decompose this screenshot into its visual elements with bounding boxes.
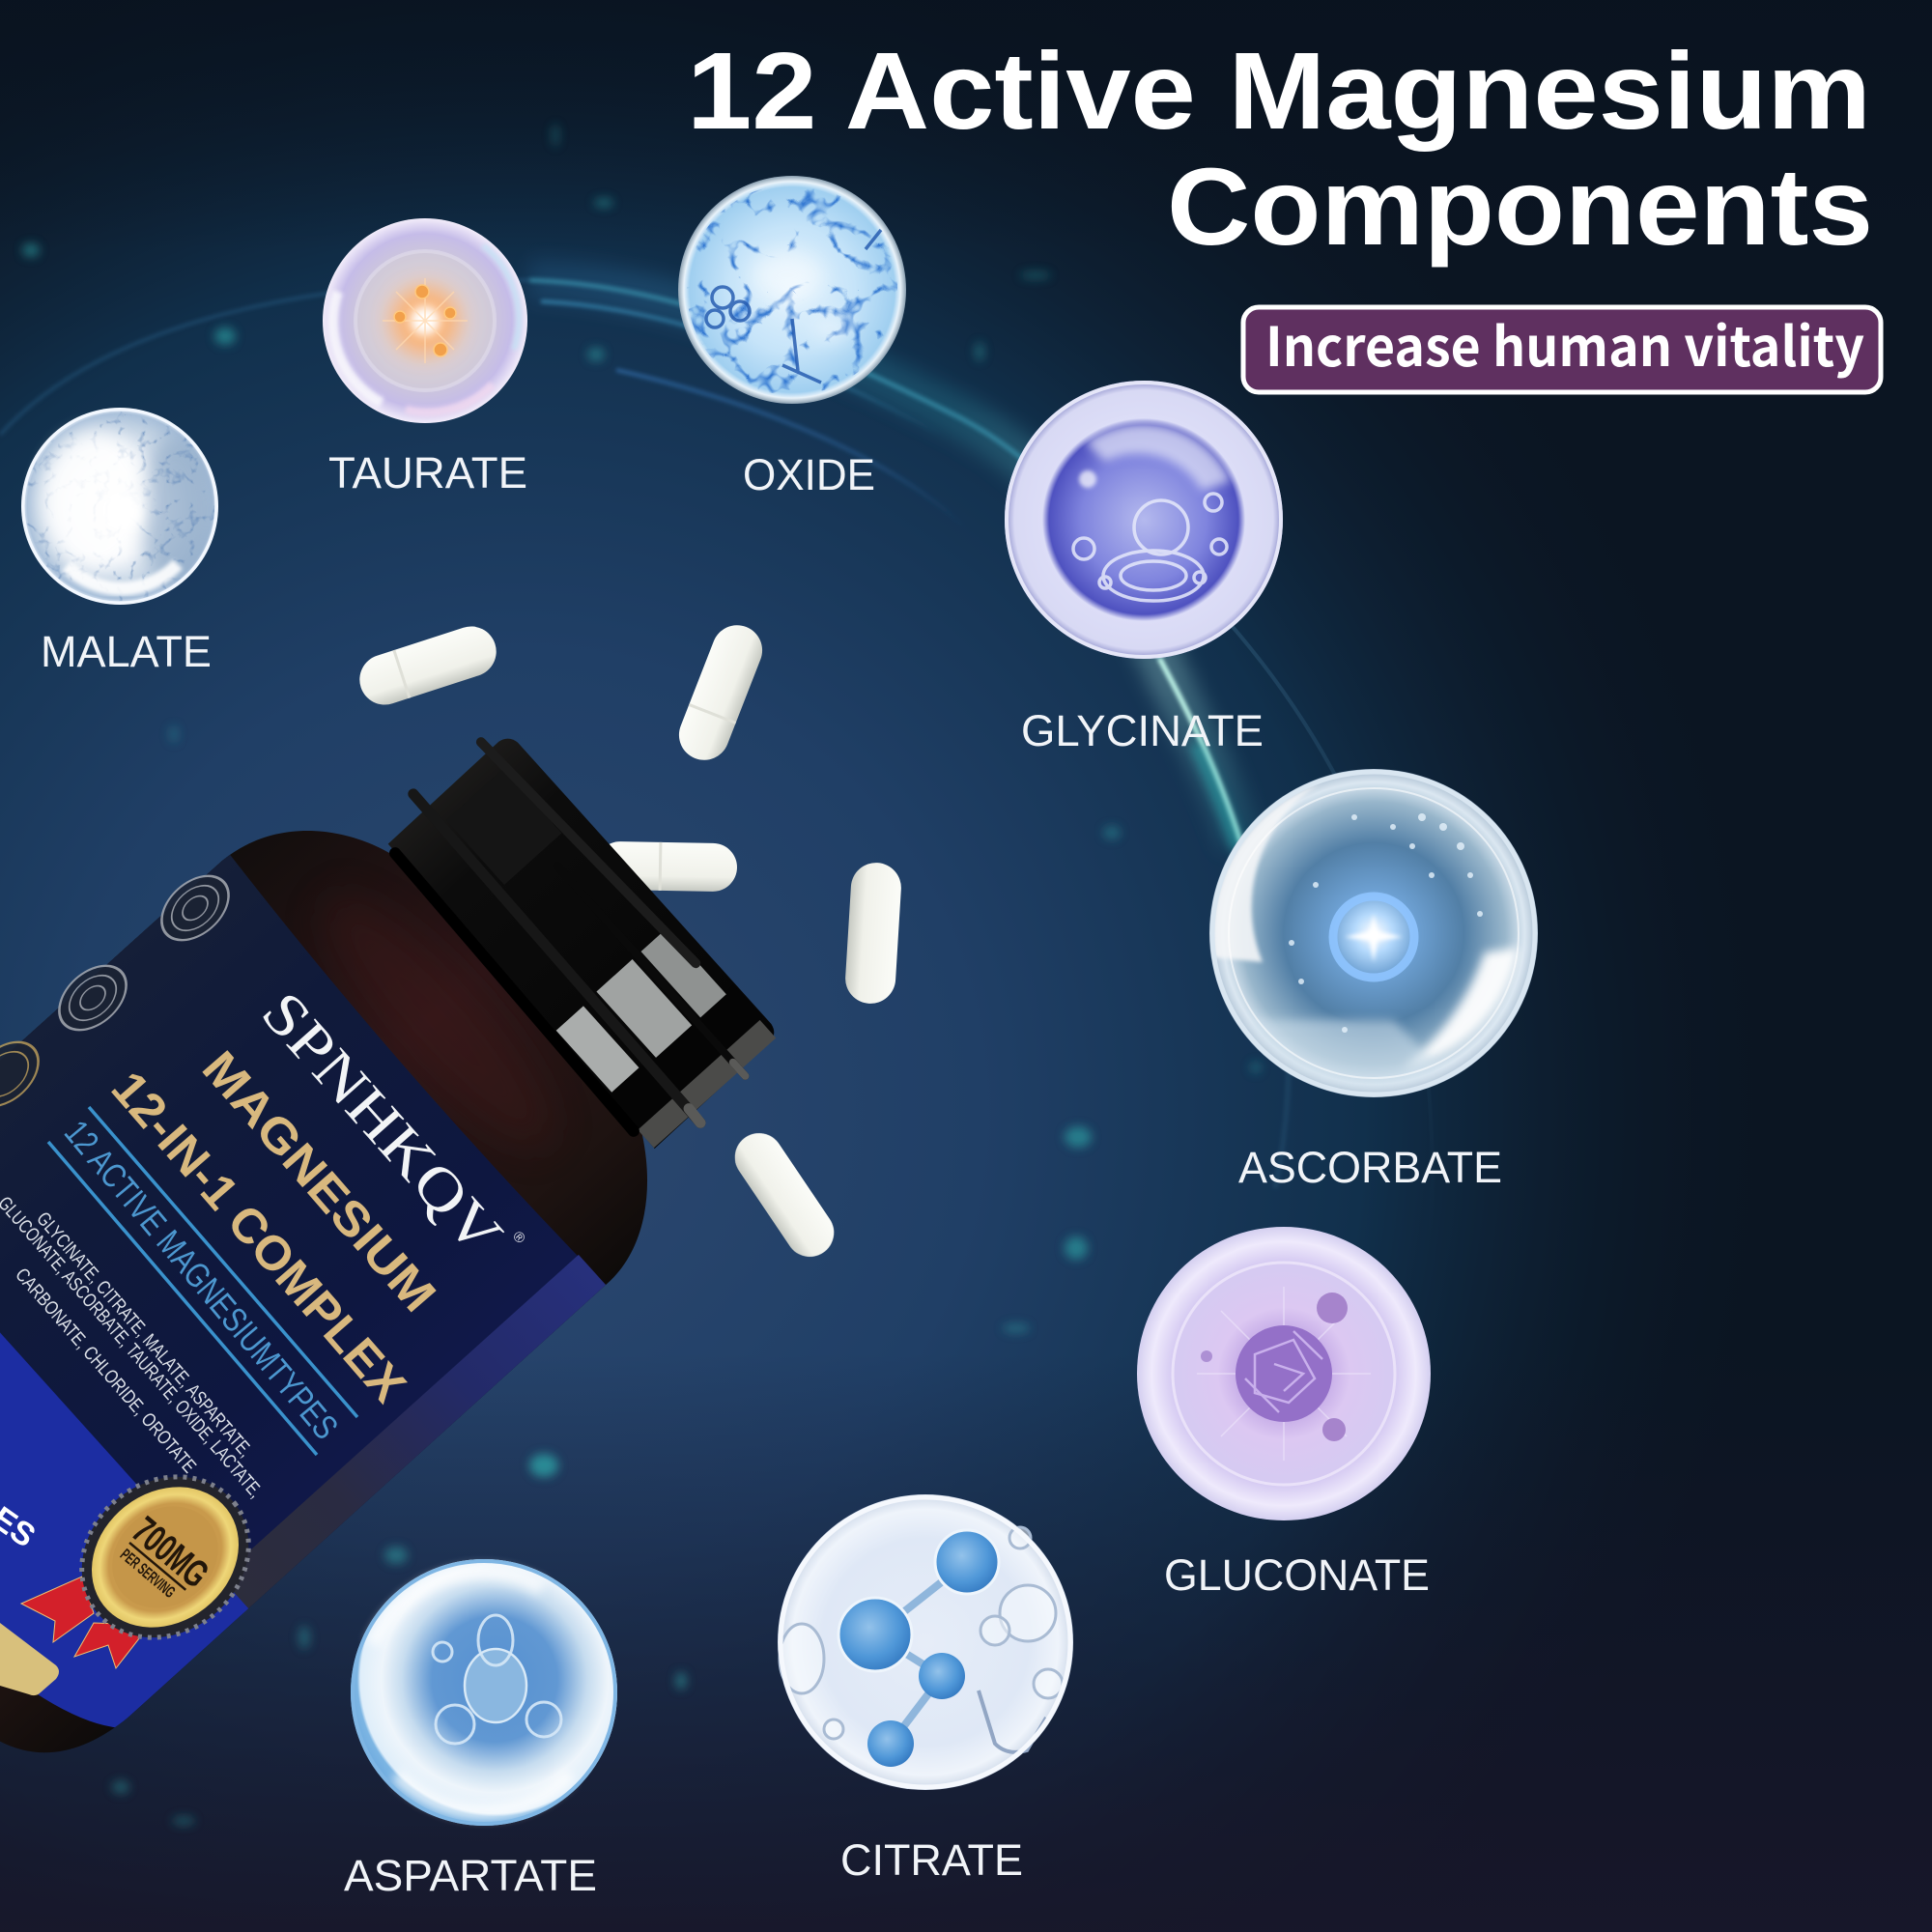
label subtitle: 12 ACTIVE MAGNESIUMTYPES xyxy=(57,1113,346,1447)
brand name: SPNHKQV xyxy=(249,980,515,1267)
component labels xyxy=(41,448,1502,1900)
title xyxy=(687,30,1873,268)
sphere: malate xyxy=(21,408,218,605)
ingredient list: GLYCINATE, CITRATE, MALATE, ASPARTATE, xyxy=(32,1208,256,1462)
label wrap xyxy=(0,854,614,1615)
label: gluconate: GLUCONATE xyxy=(1164,1550,1430,1600)
blue lower panel xyxy=(0,1333,249,1727)
title: 12 Active Magnesium xyxy=(687,30,1871,152)
capsule: upper left xyxy=(354,620,502,711)
label: malate: MALATE xyxy=(41,627,212,676)
ingredient list: CARBONATE, CHLORIDE, OROTATE xyxy=(11,1264,200,1477)
title: Components xyxy=(1167,146,1873,268)
capsule: lower xyxy=(725,1123,843,1266)
red ribbon xyxy=(21,1577,150,1668)
sphere: ascorbate xyxy=(1209,769,1538,1097)
product name: 12-in-1 complex: 12-IN-1 COMPLEX xyxy=(101,1061,416,1412)
sphere: aspartate xyxy=(351,1559,617,1826)
badge medallions xyxy=(0,864,241,1119)
product name: magnesium: MAGNESIUM xyxy=(192,1040,446,1322)
energy arc xyxy=(0,280,1433,1236)
label: glycinate: GLYCINATE xyxy=(1021,706,1264,755)
label: citrate: CITRATE xyxy=(840,1835,1023,1885)
sphere: glycinate xyxy=(1005,381,1283,659)
sphere: citrate xyxy=(778,1494,1073,1790)
gold seal xyxy=(49,1444,281,1670)
particles xyxy=(22,124,1262,1826)
label: taurate: TAURATE xyxy=(328,448,527,497)
gold bar xyxy=(0,1623,59,1695)
sphere: taurate xyxy=(323,218,527,423)
label: aspartate: ASPARTATE xyxy=(344,1851,597,1900)
bottle xyxy=(0,737,835,1752)
subtitle pill: Increase human vitality xyxy=(1265,304,1864,383)
gold seal: PER SERVING xyxy=(117,1546,179,1602)
bottle body and cap xyxy=(0,737,835,1752)
capsule: upper centre xyxy=(671,618,770,767)
label: oxide: OXIDE xyxy=(743,450,875,499)
ingredient list: GLUCONATE, ASCORBATE, TAURATE, OXIDE, LACTATE, xyxy=(0,1193,267,1502)
sphere: gluconate xyxy=(1137,1227,1431,1520)
capsule behind bottle opening xyxy=(596,841,737,892)
gold seal: 700MG xyxy=(124,1509,216,1596)
label: ascorbate: ASCORBATE xyxy=(1238,1143,1502,1192)
ingredient list xyxy=(0,1193,267,1502)
registered mark: ® xyxy=(509,1228,528,1247)
label rule lines xyxy=(48,1107,357,1455)
capsule: right xyxy=(844,862,902,1005)
sphere: oxide xyxy=(678,176,906,404)
